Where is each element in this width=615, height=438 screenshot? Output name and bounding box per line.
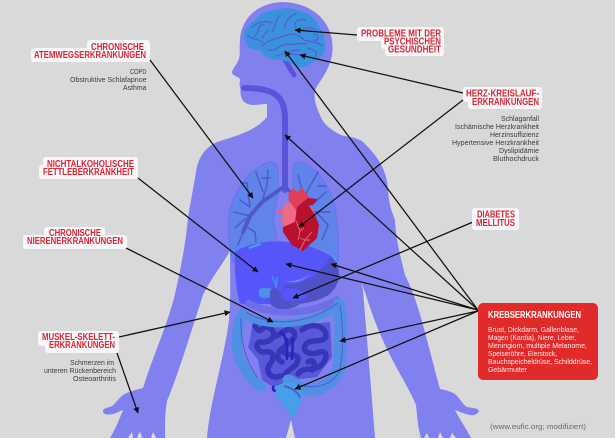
brain folds [248, 14, 322, 56]
list: atemwege: Obstruktive Schlafapnoe [70, 75, 146, 84]
list: herz-kreislauf: Bluthochdruck [493, 154, 539, 163]
panel: krebserkrankungen: Meningiom, multiple Melanome, [488, 341, 587, 350]
list: atemwege: Asthma [123, 83, 147, 92]
colon [237, 303, 343, 390]
panel: krebserkrankungen: Gebärmutter [488, 365, 527, 374]
label: nichtalkoholische fettleberkrankheit: FETTLEBERKRANKHEIT [43, 167, 134, 178]
panel: krebserkrankungen: Magen (Kardia), Niere, Leber, [488, 333, 576, 342]
intestine loops [255, 326, 326, 377]
bronchi [234, 170, 330, 245]
band under liver [246, 298, 340, 312]
label: diabetes mellitus: DIABETES [477, 210, 515, 220]
list: herz-kreislauf: Ischämische Herzkrankheit [455, 122, 540, 131]
label: chronische atemwegserkrankungen [31, 40, 150, 62]
list: muskel-skelett: unteren Rückenbereich [44, 366, 116, 375]
brain [244, 8, 325, 75]
label: nichtalkoholische fettleberkrankheit [39, 157, 138, 179]
left lung [228, 162, 278, 262]
list: muskel-skelett: Schmerzen im [70, 358, 114, 367]
list: herz-kreislauf: Schlaganfall [501, 114, 539, 123]
leg gap [286, 420, 295, 438]
spleen spots [248, 243, 261, 249]
lungs [228, 162, 338, 262]
list: atemwege [70, 67, 147, 92]
panel: krebserkrankungen: Brust, Dickdarm, Gallenblase, [488, 325, 579, 334]
bile duct [272, 276, 277, 290]
label: probleme der psychischen gesundheit [357, 27, 444, 56]
heart vessels [296, 221, 312, 250]
label: diabetes mellitus: MELLITUS [476, 218, 515, 229]
list: muskel-skelett [44, 358, 116, 383]
list: herz-kreislauf: Herzinsuffizienz [490, 130, 539, 139]
label: chronische nierenerkrankungen: CHRONISCHE [49, 228, 101, 239]
list: muskel-skelett: Osteoarthritis [73, 374, 116, 383]
label: probleme der psychischen gesundheit: PROBLEME MIT DER [361, 28, 441, 40]
list: herz-kreislauf: Hypertensive Herzkrankheit [452, 138, 540, 147]
label: chronische atemwegserkrankungen: ATEMWEGSERKRANKUNGEN [34, 50, 146, 61]
source note: (www.eufic.org; modifiziert) [490, 422, 586, 431]
list: herz-kreislauf [452, 114, 540, 163]
label: chronische nierenerkrankungen [23, 227, 127, 249]
label: probleme der psychischen gesundheit: PSYCHISCHEN [384, 37, 441, 48]
small intestine [248, 320, 332, 391]
panel: krebserkrankungen: Speiseröhre, Eierstock, [488, 349, 557, 358]
label: probleme der psychischen gesundheit: GESUNDHEIT [388, 45, 441, 56]
duodenum [270, 288, 300, 309]
brainstem [284, 58, 294, 75]
aorta [288, 187, 310, 215]
stomach [276, 256, 339, 304]
label: herz-kreislauf-erkrankungen: ERKRANKUNGEN [472, 97, 539, 108]
label: muskel-skelett-erkrankungen [38, 331, 119, 353]
colon inner lines [241, 303, 343, 387]
panel: krebserkrankungen [478, 303, 598, 380]
throat and esophagus [244, 88, 285, 190]
pulmonary stub [277, 209, 283, 214]
label: muskel-skelett-erkrankungen: MUSKEL-SKELETT- [42, 332, 115, 343]
right lung [293, 162, 338, 262]
arrows [117, 30, 478, 413]
label: chronische atemwegserkrankungen: CHRONISCHE [91, 42, 144, 53]
label: muskel-skelett-erkrankungen: ERKRANKUNGEN [49, 340, 115, 351]
liver highlight [284, 274, 310, 282]
label: chronische nierenerkrankungen: NIERENERKRANKUNGEN [27, 236, 123, 247]
spleen dot [333, 256, 337, 260]
label: diabetes mellitus [472, 208, 519, 230]
list: herz-kreislauf: Dyslipidämie [499, 146, 539, 155]
list: atemwege: COPD [130, 67, 147, 76]
gallbladder and pancreas [259, 288, 278, 298]
dark duct [273, 332, 293, 391]
label: nichtalkoholische fettleberkrankheit: NICHTALKOHOLISCHE [47, 159, 134, 170]
right atrium [282, 203, 297, 229]
panel: krebserkrankungen: Bauchspeicheldrüse, Schilddrüse, [488, 357, 592, 366]
heart [277, 187, 319, 251]
stomach front [281, 288, 308, 302]
panel: krebserkrankungen: KREBSERKRANKUNGEN [488, 310, 581, 321]
finger gaps [128, 431, 456, 438]
label: herz-kreislauf-erkrankungen: HERZ-KREISLAUF- [466, 88, 539, 100]
rectum [276, 382, 302, 419]
label: herz-kreislauf-erkrankungen [463, 87, 542, 109]
liver [235, 241, 337, 305]
ventricle [283, 198, 319, 251]
rectum shade [284, 386, 300, 398]
left atrium [303, 207, 316, 219]
human body silhouette [103, 2, 479, 438]
